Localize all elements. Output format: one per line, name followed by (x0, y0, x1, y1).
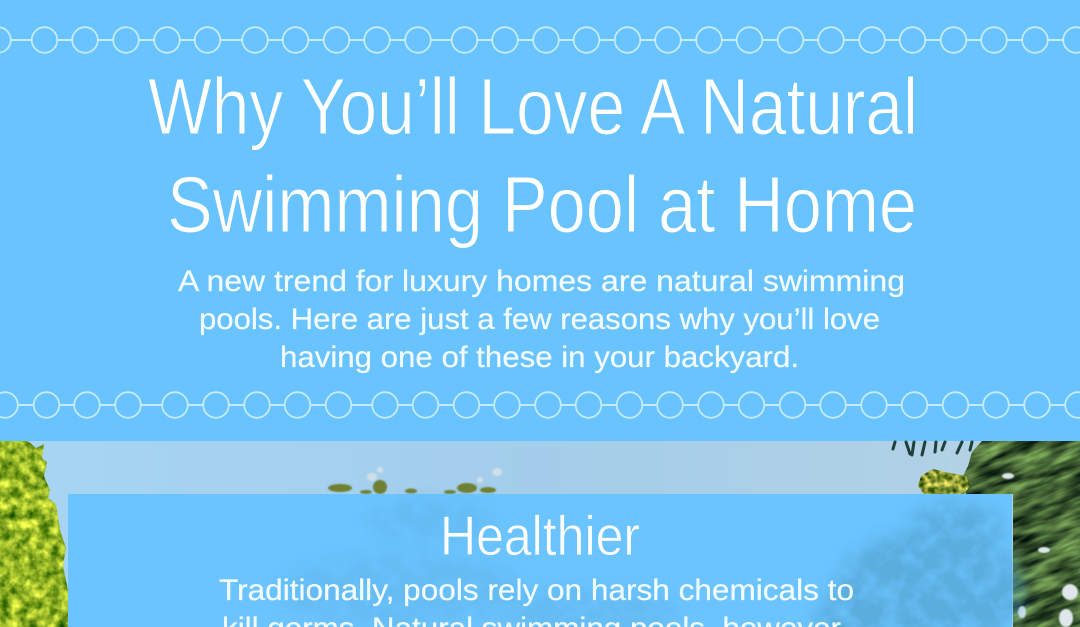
title: Why You’ll Love A Natural (148, 62, 918, 151)
panel body text (219, 574, 854, 627)
intro text: having one of these in your backyard. (280, 341, 799, 374)
faint tree shadows in panel (815, 502, 1025, 627)
intro text: A new trend for luxury homes are natural swimming (178, 265, 905, 298)
right palm tree (892, 440, 1080, 627)
header background (0, 0, 1080, 441)
title (148, 62, 918, 249)
panel: Healthier (68, 494, 1025, 627)
panel body text: Traditionally, pools rely on harsh chemicals to (219, 574, 854, 607)
intro text (178, 265, 905, 374)
title: Swimming Pool at Home (167, 160, 917, 249)
background photo: sky and trees (0, 440, 1080, 627)
bottom bead border (0, 392, 1080, 418)
intro text: pools. Here are just a few reasons why you’ll love (199, 303, 880, 336)
left tree (0, 441, 68, 627)
treetops above panel (328, 467, 502, 494)
top bead border (0, 27, 1080, 53)
panel heading: Healthier (440, 504, 640, 567)
